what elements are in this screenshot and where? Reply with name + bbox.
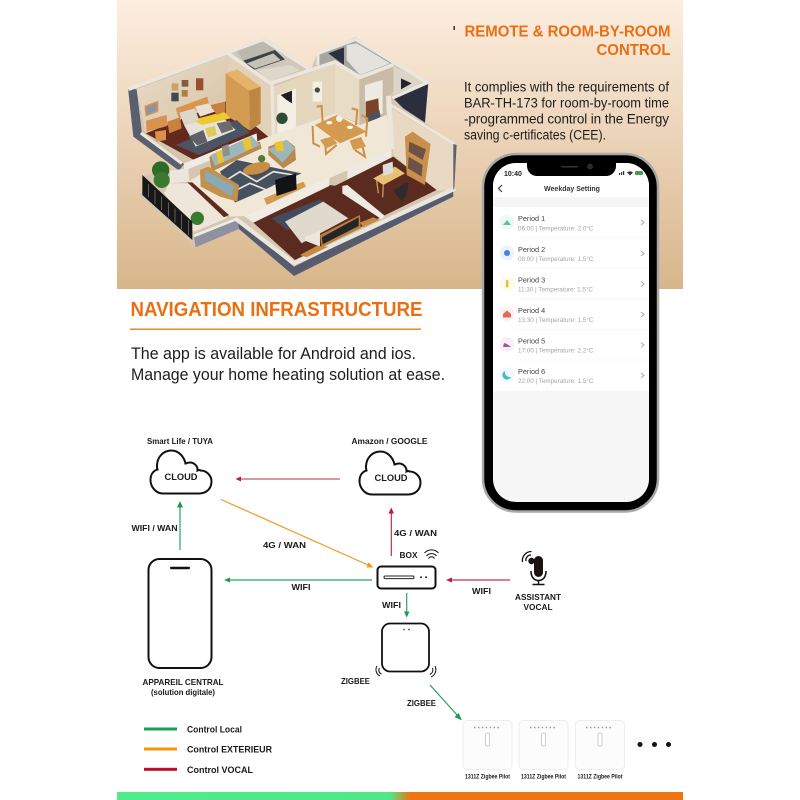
text block: compliance description: saving c-ertificates (CEE). [464, 128, 606, 142]
settings list [493, 207, 649, 391]
module: pilot 2: 1311Z Zigbee Pilot [521, 774, 566, 780]
arrow: amazon cloud to smart life cloud [236, 476, 340, 482]
text block: app availability: The app is available for Android and ios. [131, 344, 416, 363]
settings list: Period 6 [518, 367, 545, 376]
arrow: box to amazon cloud [388, 508, 394, 556]
label: smart life tuya: Smart Life / TUYA [147, 436, 213, 446]
settings list: 08:00 | Temperature: 1.5°C [518, 255, 594, 263]
icon: central smartphone [148, 559, 212, 668]
legend [144, 724, 272, 776]
label: wifi phone link: WIFI [292, 582, 310, 592]
phone mockup: weekday setting app: Weekday Setting [544, 186, 600, 193]
label: box: BOX [400, 550, 418, 560]
text block: compliance description: BAR-TH-173 for room-by-room time [464, 96, 669, 110]
settings list: Period 4 [518, 306, 545, 315]
settings list: 17:00 | Temperature: 2.2°C [518, 346, 594, 354]
panel: top gradient background [117, 0, 683, 289]
illustration: isometric apartment floor plan [128, 37, 457, 276]
arrow: smart life cloud to box [221, 500, 374, 568]
module: pilot 1 [463, 720, 512, 780]
label: amazon google: Amazon / GOOGLE [352, 436, 428, 446]
label: wifi voice link: WIFI [472, 586, 491, 596]
text block: compliance description: It complies with the requirements of [464, 80, 669, 94]
legend: Control VOCAL [187, 765, 253, 776]
icon: cloud right [360, 452, 420, 494]
arrow: gateway to pilot modules [430, 685, 462, 720]
ellipsis: more modules [638, 742, 671, 747]
text block: compliance description [464, 80, 669, 142]
module: pilot 3 [576, 720, 624, 780]
stray mark [454, 26, 455, 30]
heading: remote and room-by-room control [464, 24, 671, 59]
label: assistant vocal [515, 592, 562, 612]
settings list: Period 5 [518, 336, 545, 346]
text block: compliance description: -programmed control in the Energy [464, 112, 669, 126]
heading: remote and room-by-room control: CONTROL [596, 42, 671, 59]
arrow: central device to smart life cloud [177, 501, 183, 550]
settings list: 11:30 | Temperature: 1.5°C [518, 286, 593, 294]
icon: wifi signal [424, 550, 438, 558]
heading: remote and room-by-room control: REMOTE & ROOM-BY-ROOM [464, 24, 670, 40]
phone mockup: weekday setting app [483, 154, 658, 512]
settings list: Period 1 [518, 214, 545, 223]
legend: Control Local [187, 724, 242, 736]
phone mockup: weekday setting app: 10:40 [504, 171, 522, 178]
label: wifi wan: WIFI / WAN [132, 523, 178, 533]
module: pilot 1: 1311Z Zigbee Pilot [465, 774, 510, 780]
label: assistant vocal: ASSISTANT [515, 592, 562, 602]
bottom colour bar [117, 792, 683, 800]
heading: navigation infrastructure: NAVIGATION INFRASTRUCTURE [130, 299, 422, 321]
icon: cloud right: CLOUD [374, 473, 408, 484]
settings list: Period 3 [518, 276, 545, 284]
label: appareil central [142, 677, 224, 697]
arrow: voice assistant to box [446, 578, 510, 582]
label: appareil central: (solution digitale) [151, 688, 215, 697]
icon: cloud left [150, 450, 212, 494]
label: assistant vocal: VOCAL [524, 602, 552, 612]
settings list: 06:00 | Temperature: 2.0°C [518, 224, 594, 232]
icon: zigbee gateway [376, 624, 436, 677]
label: 4g wan box: 4G / WAN [394, 528, 437, 538]
icon: cloud left: CLOUD [164, 472, 198, 483]
module: pilot 3: 1311Z Zigbee Pilot [578, 774, 622, 780]
module: pilot 2 [519, 720, 568, 780]
text block: app availability: Manage your home heating solution at ease. [131, 365, 445, 384]
legend: Control EXTERIEUR [187, 744, 272, 756]
text block: app availability [131, 344, 445, 384]
settings list: Period 2 [518, 245, 545, 254]
icon: box router [378, 566, 436, 588]
icon: microphone voice assistant [522, 551, 546, 584]
arrow: box to gateway [404, 593, 410, 618]
label: zigbee gateway: ZIGBEE [341, 676, 370, 686]
settings list: 22:00 | Temperature: 1.5°C [518, 377, 594, 385]
label: wifi gateway link: WIFI [382, 600, 401, 610]
label: appareil central: APPAREIL CENTRAL [142, 677, 224, 687]
arrow: box to central device [224, 578, 372, 582]
label: zigbee link: ZIGBEE [407, 698, 436, 708]
settings list: 13:30 | Temperature: 1.5°C [518, 316, 594, 324]
label: 4g wan left: 4G / WAN [263, 540, 306, 550]
